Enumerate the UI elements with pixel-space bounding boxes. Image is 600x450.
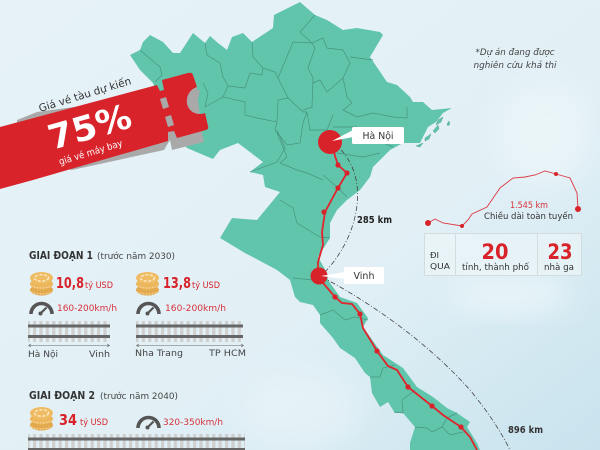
phase 1 heading: (trước năm 2030) [97,251,175,262]
cost: 13,8 [163,274,220,292]
ticket perforations [160,97,174,127]
ticket notch shadow [187,87,198,108]
phase 1 [28,250,246,360]
dashed arc: Hanoi to Vinh [320,143,358,277]
stats box: QUA [430,262,451,271]
phase 2 heading: (trước năm 2040) [100,391,178,402]
Vinh marker: Vinh [354,271,374,282]
cost: 13,8: 13,8 [163,274,191,292]
ticket caption: giá vé máy bay [58,138,124,168]
footnote [474,48,557,71]
stats box: 23 [548,240,572,264]
islands off Quang Ninh [416,117,450,147]
Hanoi marker: Hà Nội [362,131,394,142]
total length line: Chiều dài toàn tuyến [484,211,573,222]
stats box: ĐI [430,251,439,260]
phase 1 heading: GIAI ĐOẠN 1 [29,250,93,262]
coins: phase 2 [30,407,53,430]
speed 2: 160-200km/h [165,304,226,314]
stats box: tỉnh, thành phố [462,262,530,273]
gauge: speed 1 [31,304,52,316]
province borders [140,15,463,435]
track: Nha Trang - TP HCM: Nha Trang [135,349,183,359]
phase 1 heading [29,250,175,262]
footnote: *Dự án đang được [476,48,555,58]
distance label: 896 km: 896 km [508,425,543,436]
gauge: speed 2 [138,304,159,316]
speed: phase 2: 320-350km/h [163,418,223,428]
cost: 10,8: 10,8 [56,274,84,292]
cost: 34: 34 [59,411,77,429]
railway route [318,145,477,450]
cost: 10,8: tỷ USD [85,281,113,291]
cost: 34 [59,411,108,429]
track: Nha Trang - TP HCM [135,321,246,359]
coins: Ha Noi - Vinh [30,272,53,296]
phase 2 heading [29,390,178,402]
Vinh marker [310,267,384,284]
dashed arc: Vinh to next leg [322,277,510,450]
ticket heading: Giá vé tàu dự kiến [37,75,133,115]
ticket [0,73,208,189]
ticket value: 75% [43,97,136,159]
phase 2 heading: GIAI ĐOẠN 2 [29,390,95,402]
cost: 34: tỷ USD [80,418,108,428]
total length line [425,171,581,228]
gauge: phase 2 [138,418,159,430]
stats box: 20 [482,240,508,264]
coins: Nha Trang - TP HCM [136,272,159,296]
track: Ha Noi - Vinh [28,321,110,360]
phase 2 [28,390,245,450]
speed 1: 160-200km/h [57,304,117,314]
stats box: nhà ga [544,263,574,273]
track: Ha Noi - Vinh: Vinh [89,350,110,360]
total length line: 1.545 km [510,201,548,211]
footnote: nghiên cứu khả thi [474,60,557,71]
distance label: 285 km: 285 km [357,215,392,226]
track: Ha Noi - Vinh: Hà Nội [28,349,58,360]
track: Nha Trang - TP HCM: TP HCM [208,349,246,359]
track: phase 2 [28,434,245,450]
ticket shadow [17,90,204,170]
cost: 10,8 [56,274,113,292]
cost: 13,8: tỷ USD [192,281,220,291]
map of northern and central Vietnam [130,2,480,450]
stats box [424,234,582,276]
Hanoi marker [318,127,404,154]
